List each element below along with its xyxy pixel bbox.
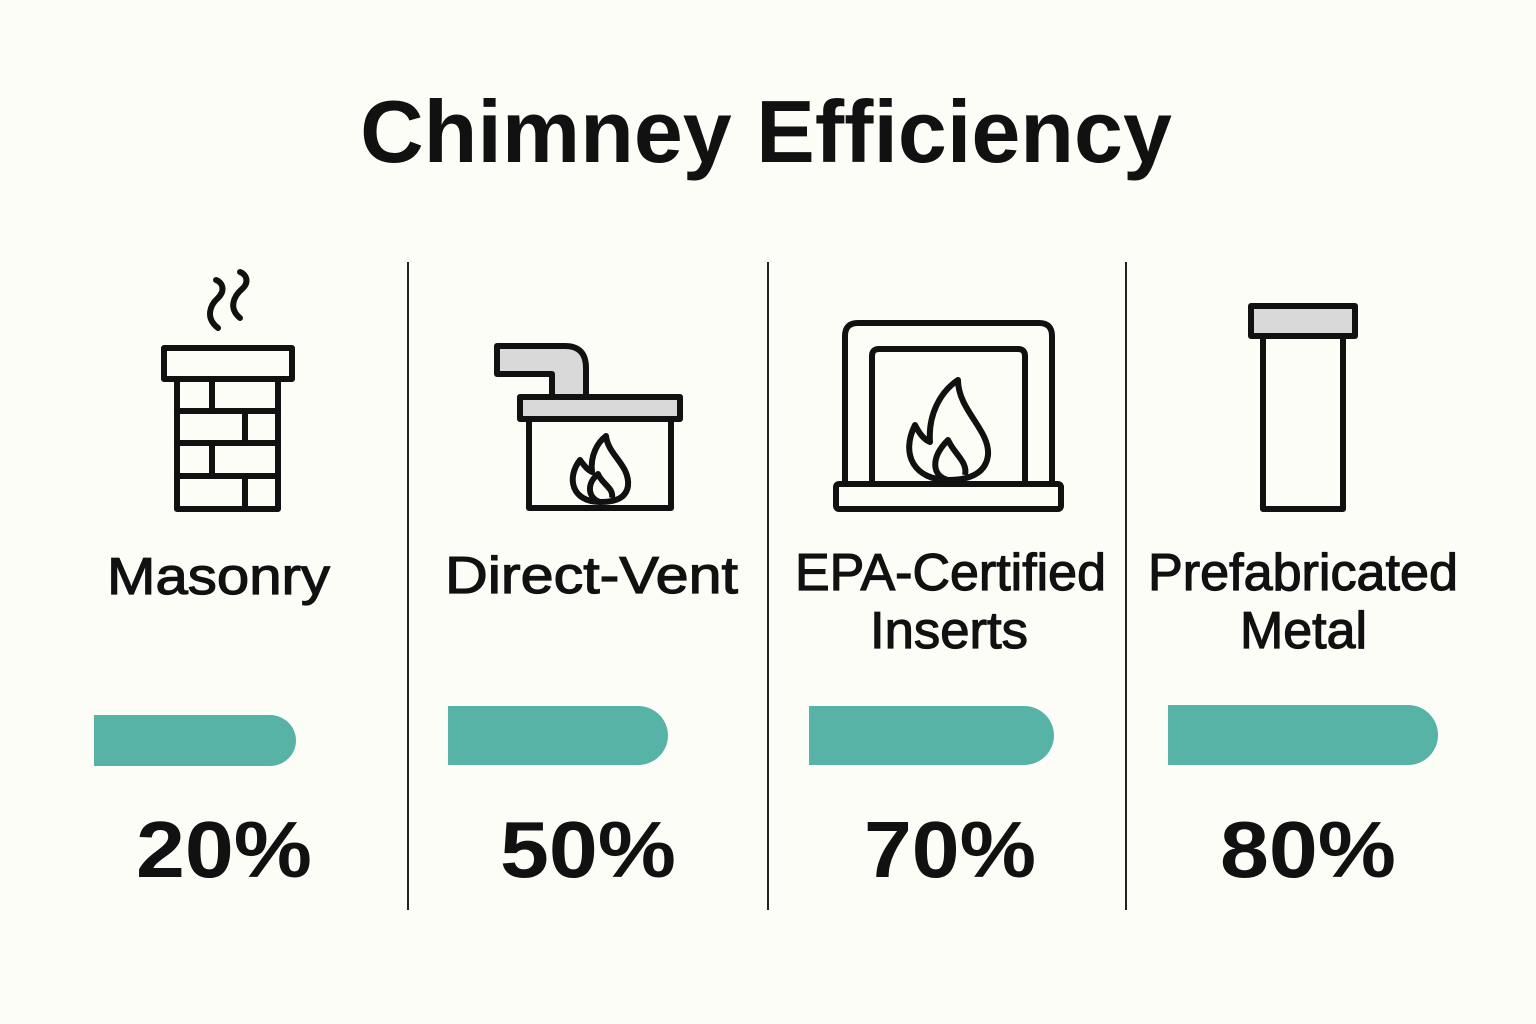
bar: direct-vent [448,706,668,765]
icon: masonry chimney [164,272,292,509]
panel: prefabricated metal: Metal [1240,602,1367,660]
icon: metal chimney [1251,306,1355,509]
bar: EPA inserts [809,706,1054,765]
bar: masonry [94,715,296,766]
icon: fireplace insert [836,323,1061,509]
value: EPA inserts: 70% [864,805,1036,894]
label: direct-vent: Direct-Vent [445,547,739,605]
panel: EPA inserts [795,323,1106,894]
panel: EPA inserts: Inserts [870,602,1028,660]
value: prefabricated metal: 80% [1220,805,1396,894]
label: prefabricated metal: Prefabricated [1148,544,1458,602]
value: masonry: 20% [136,805,312,894]
panel: masonry [94,272,330,894]
value: direct-vent: 50% [500,805,676,894]
title: Chimney Efficiency [360,82,1172,181]
icon: direct-vent fireplace [497,346,680,508]
panel: direct-vent [445,346,739,894]
label: masonry: Masonry [107,548,330,606]
panel: prefabricated metal [1148,306,1458,894]
bar: prefabricated metal [1168,705,1438,765]
label: EPA inserts: EPA-Certified [795,544,1106,602]
